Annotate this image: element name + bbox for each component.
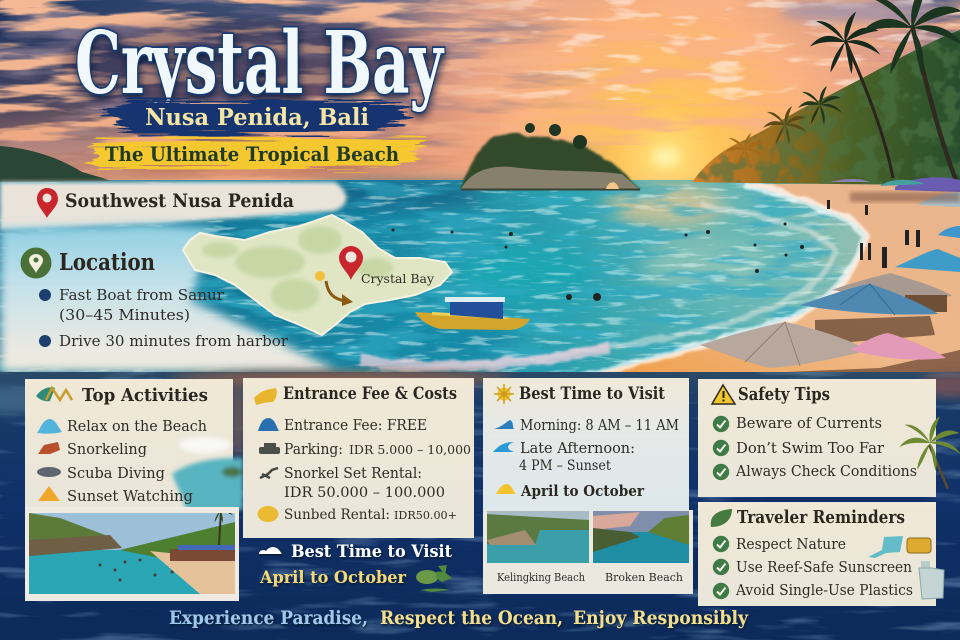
panel: best time to visit: [483, 378, 689, 512]
panel: top activities: [25, 379, 243, 511]
map pin: [339, 246, 363, 280]
icon: palm tree: [899, 416, 960, 489]
icon: plastic bottle: [919, 561, 944, 599]
reminders list: Respect Nature: [736, 535, 846, 553]
best time heading: Best Time to Visit: [519, 384, 665, 404]
panel: safety tips: [698, 379, 936, 497]
palm trees: [725, 0, 960, 180]
activities heading: Top Activities: [82, 385, 208, 406]
background: deep ocean: [0, 371, 960, 640]
best time list: April to October: [520, 483, 644, 500]
photo: Crystal Bay beach: [25, 500, 239, 601]
reminders list: Avoid Single-Use Plastics: [735, 581, 913, 599]
fee list: Parking:: [284, 442, 343, 458]
safety list: Don’t Swim Too Far: [736, 439, 885, 457]
icon: beach towel: [868, 536, 903, 558]
distant headland, left: [0, 146, 110, 182]
best time list: Morning: 8 AM – 11 AM: [520, 418, 679, 434]
beach umbrellas and people: [392, 177, 960, 380]
boat: [415, 297, 530, 330]
fee list: Sunbed Rental:: [284, 507, 390, 523]
icon: yellow bag: [907, 538, 931, 553]
title: Crystal Bay: Crystal Bay: [75, 13, 445, 114]
photo: Broken Beach: [593, 510, 693, 594]
footer slogan: Respect the Ocean,: [380, 608, 563, 629]
sun: [652, 147, 680, 167]
safety list: Beware of Currents: [736, 414, 882, 432]
icon: turtle: [416, 565, 452, 592]
best time list: 4 PM – Sunset: [519, 458, 612, 474]
activity list: Relax on the Beach: [67, 418, 207, 435]
callout: best time to visit: April to October: [259, 568, 406, 587]
safety list: [713, 414, 917, 480]
location banner: [0, 182, 346, 230]
fee list: IDR 50.000 – 100.000: [284, 485, 445, 501]
map label: Crystal Bay: [361, 272, 434, 286]
location details: Drive 30 minutes from harbor: [59, 334, 288, 350]
location heading: Location: [59, 249, 155, 276]
panel: location: [0, 224, 340, 372]
background: sunset sky: [0, 0, 960, 185]
pin icon: [37, 188, 58, 218]
fee heading: Entrance Fee & Costs: [283, 384, 457, 403]
rock island: [461, 123, 640, 190]
fee list: IDR 5.000 – 10,000: [349, 443, 471, 457]
location icon: [20, 248, 52, 278]
fee list: Snorkel Set Rental:: [284, 466, 422, 482]
tagline: The Ultimate Tropical Beach: The Ultimate Tropical Beach: [105, 143, 399, 166]
background: sandy beach: [360, 184, 960, 380]
activity list: Snorkeling: [67, 441, 148, 458]
activities heading: [36, 385, 208, 406]
callout: best time to visit: Best Time to Visit: [291, 542, 452, 561]
footer slogan: Experience Paradise,: [169, 608, 368, 629]
photo: Broken Beach: Broken Beach: [605, 570, 684, 584]
photo: Kelingking Beach: [483, 510, 593, 594]
location details: [39, 288, 288, 350]
jungle hillside: [690, 20, 960, 190]
reminders heading: Traveler Reminders: [737, 507, 905, 528]
fee list: IDR50.00+: [394, 508, 457, 522]
safety list: Always Check Conditions: [735, 462, 917, 480]
location details: (30–45 Minutes): [59, 308, 190, 324]
map of Nusa Penida: [183, 215, 452, 335]
safety heading: [712, 384, 830, 405]
footer slogan: [169, 608, 749, 629]
fee list: Entrance Fee: FREE: [284, 418, 427, 434]
subtitle: Nusa Penida, Bali: Nusa Penida, Bali: [145, 104, 369, 131]
activity list: [37, 418, 207, 505]
painted coast detail: [172, 437, 243, 510]
route arrow: [315, 271, 353, 306]
tagline: The Ultimate Tropical Beach: [88, 137, 428, 168]
callout: best time to visit: [259, 542, 452, 587]
fee heading: [254, 384, 457, 405]
photo: Kelingking Beach: Kelingking Beach: [497, 570, 586, 584]
location details: Fast Boat from Sanur: [59, 288, 224, 304]
icon: sun: [494, 384, 514, 404]
activity list: Scuba Diving: [67, 465, 166, 482]
safety heading: Safety Tips: [738, 384, 830, 405]
fee list: [258, 418, 471, 523]
activity list: Sunset Watching: [67, 488, 194, 505]
reminders list: [713, 535, 913, 599]
panel: entrance fee and costs: [243, 378, 474, 538]
location name: Southwest Nusa Penida: [65, 191, 294, 212]
best time list: [493, 418, 679, 500]
background: turquoise sea: [0, 180, 960, 380]
reminders list: Use Reef-Safe Sunscreen: [736, 558, 912, 576]
best time list: Late Afternoon:: [520, 441, 635, 457]
footer slogan: Enjoy Responsibly: [573, 608, 749, 629]
subtitle: Nusa Penida, Bali: [100, 100, 412, 135]
panel: traveler reminders: [698, 502, 936, 606]
